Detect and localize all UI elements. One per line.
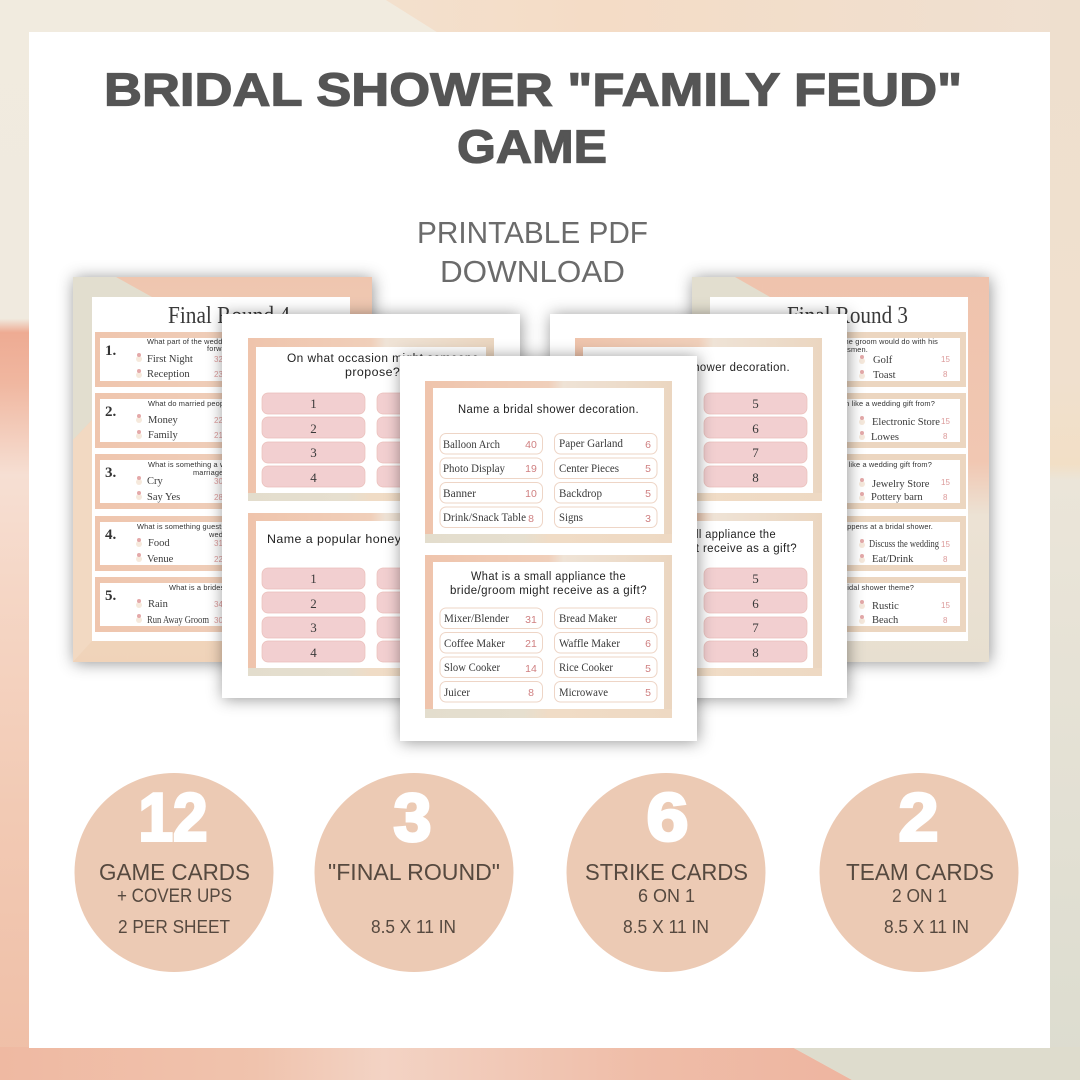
row 1: groomsmen. xyxy=(825,345,868,354)
row 3: Jewelry Store xyxy=(872,479,930,490)
card: bridal shower decoration answers: Backdrop xyxy=(559,487,602,500)
row 4: 4. xyxy=(105,527,116,543)
heading: Final Round 3: Final Round 3 xyxy=(787,303,908,329)
card: small appliance answers: 6 xyxy=(645,638,651,650)
row 1: 32 xyxy=(214,355,223,364)
card: honeymoon question: 4 xyxy=(310,645,317,660)
row 4 xyxy=(95,516,347,571)
card: bridal shower decoration answers: Balloon Arch xyxy=(443,438,500,451)
card: propose question: propose? xyxy=(345,365,400,379)
card: small appliance answers: 5 xyxy=(645,663,651,675)
card: bridal shower decoration answers: 10 xyxy=(525,488,537,500)
card: bridal shower decoration answers: Drink/Snack Table xyxy=(443,511,526,524)
card: decoration question: 5 xyxy=(752,396,759,411)
row 2 xyxy=(95,393,347,448)
page: answer cards center xyxy=(400,356,697,741)
row 4: 31 xyxy=(214,539,223,548)
circle: 3 final round: 3 xyxy=(394,780,432,856)
row 1: 8 xyxy=(943,370,948,379)
row 4: What is something guests xyxy=(137,522,225,531)
row 4: Eat/Drink xyxy=(872,554,914,565)
row 1: 1. xyxy=(105,343,116,359)
card: small appliance answers: What is a small appliance the xyxy=(471,569,626,583)
page: cover-up cards right xyxy=(550,314,847,698)
circle: 2 team cards xyxy=(820,773,1018,972)
card: propose question: 3 xyxy=(310,445,317,460)
row 2: 8 xyxy=(943,432,948,441)
card: decoration question xyxy=(575,338,822,501)
card: small appliance answers: Rice Cooker xyxy=(559,661,613,674)
row 1: First Night xyxy=(147,354,193,365)
card: appliance question: 7 xyxy=(752,620,759,635)
card: decoration question: 7 xyxy=(752,445,759,460)
circle: 2 team cards: 2 ON 1 xyxy=(892,886,947,906)
row 5: Run Away Groom xyxy=(147,615,209,626)
row 4: something that happens at a bridal shower. xyxy=(786,522,933,531)
card: propose question: 2 xyxy=(310,421,317,436)
row 5: 8 xyxy=(943,616,948,625)
row 2: What do married people xyxy=(148,399,230,408)
row 3: 15 xyxy=(941,478,950,487)
circle: 6 strike cards xyxy=(566,773,766,972)
card: appliance question: What is a small appliance the xyxy=(621,527,776,541)
card: small appliance answers: 8 xyxy=(528,687,534,699)
row 2 xyxy=(715,393,966,448)
circle: 12 game cards: 12 xyxy=(138,780,208,856)
circle: 12 game cards: + COVER UPS xyxy=(117,886,232,907)
row 2: 21 xyxy=(214,431,223,440)
card: honeymoon question: Name a popular honeymoon destination. xyxy=(267,532,507,546)
row 4: Discuss the wedding xyxy=(869,539,940,550)
card: small appliance answers: 5 xyxy=(645,687,651,699)
row 5: a popular bridal shower theme? xyxy=(806,583,914,592)
row 4: Venue xyxy=(147,554,174,565)
card: decoration question: Name a bridal shower decoration. xyxy=(608,360,790,374)
circle: 6 strike cards: 8.5 X 11 IN xyxy=(623,917,709,937)
row 5: 5. xyxy=(105,588,116,604)
row 4: wedding xyxy=(208,530,238,539)
title xyxy=(104,64,962,172)
card: bridal shower decoration answers: Signs xyxy=(559,511,583,524)
circle: 3 final round: 8.5 X 11 IN xyxy=(371,917,456,937)
row 2: Family xyxy=(148,430,179,441)
card: bridal shower decoration answers: Banner xyxy=(443,487,476,500)
card: appliance question xyxy=(575,513,822,676)
page: Final Round 3 xyxy=(692,277,989,662)
card: propose question xyxy=(248,338,494,501)
card: small appliance answers: Coffee Maker xyxy=(444,637,505,650)
row 1 xyxy=(715,332,966,387)
row 4: 22 xyxy=(214,555,223,564)
row 5: Rain xyxy=(148,599,169,610)
card: bridal shower decoration answers: Center Pieces xyxy=(559,462,619,475)
row 3: Cry xyxy=(147,476,164,487)
card: bridal shower decoration answers: 6 xyxy=(645,439,651,451)
row 3 xyxy=(715,454,966,509)
title: GAME xyxy=(457,120,607,172)
circle: 3 final round xyxy=(314,773,514,972)
row 5: 34 xyxy=(214,600,223,609)
row 1: Reception xyxy=(147,369,190,380)
row 1: What part of the wedding xyxy=(147,337,233,346)
card: bridal shower decoration answers: 19 xyxy=(525,463,537,475)
card: honeymoon question xyxy=(248,513,507,676)
card: appliance question: 8 xyxy=(752,645,759,660)
row 3: 30 xyxy=(214,477,223,486)
card: decoration question: 8 xyxy=(752,470,759,485)
card: bridal shower decoration answers: 3 xyxy=(645,513,651,525)
row 5 xyxy=(95,577,347,632)
card: decoration question: 6 xyxy=(752,421,759,436)
card: appliance question: bride/groom might receive as a gift? xyxy=(600,541,797,555)
card: bridal shower decoration answers: Name a bridal shower decoration. xyxy=(458,402,639,416)
circle: 12 game cards: 2 PER SHEET xyxy=(118,917,230,937)
row 1: Toast xyxy=(873,370,896,381)
card: honeymoon question: 1 xyxy=(310,571,317,586)
card: small appliance answers: Slow Cooker xyxy=(444,661,500,674)
card: small appliance answers: Juicer xyxy=(444,686,470,699)
card: bridal shower decoration answers: 8 xyxy=(528,513,534,525)
card: propose question: On what occasion might someone xyxy=(287,351,479,365)
card: small appliance answers: 6 xyxy=(645,614,651,626)
row 1: Golf xyxy=(873,355,893,366)
card: small appliance answers: Bread Maker xyxy=(559,612,617,625)
card: honeymoon question: 2 xyxy=(310,596,317,611)
row 5: What is a bridesmaid xyxy=(169,583,241,592)
row 2: 22 xyxy=(214,416,223,425)
row 5: Beach xyxy=(872,615,899,626)
circle: 6 strike cards: STRIKE CARDS xyxy=(585,859,748,885)
card: small appliance answers: Waffle Maker xyxy=(559,637,620,650)
row 2: would a man like a wedding gift from? xyxy=(805,399,935,408)
row 3: What is something a wife xyxy=(148,460,234,469)
circle: 2 team cards: TEAM CARDS xyxy=(846,859,994,885)
card: appliance question: 6 xyxy=(752,596,759,611)
circle: 6 strike cards: 6 xyxy=(646,780,688,856)
subtitle: DOWNLOAD xyxy=(440,254,625,289)
row 4: 15 xyxy=(941,540,950,549)
circle: 12 game cards xyxy=(74,773,274,972)
heading: Final Round 4: Final Round 4 xyxy=(168,303,290,329)
row 2: 2. xyxy=(105,404,116,420)
page: cover-up cards left xyxy=(222,314,520,698)
row 3: would a woman like a wedding gift from? xyxy=(792,460,932,469)
row 1: forward xyxy=(207,344,233,353)
row 5 xyxy=(715,577,966,632)
row 3: Say Yes xyxy=(147,492,180,503)
row 3: Pottery barn xyxy=(871,492,923,503)
subtitle xyxy=(417,215,648,289)
row 2: Electronic Store xyxy=(872,417,940,428)
row 5: 15 xyxy=(941,601,950,610)
row 1: the groom would do with his xyxy=(842,337,938,346)
row 2: 15 xyxy=(941,417,950,426)
row 4: 8 xyxy=(943,555,948,564)
circle: 6 strike cards: 6 ON 1 xyxy=(638,886,695,906)
row 3: marriage xyxy=(193,468,223,477)
card: small appliance answers: 21 xyxy=(525,638,537,650)
row 4: Food xyxy=(148,538,170,549)
subtitle: PRINTABLE PDF xyxy=(417,215,648,250)
card: honeymoon question: 3 xyxy=(310,620,317,635)
circle: 12 game cards: GAME CARDS xyxy=(99,859,250,885)
card: small appliance answers: 31 xyxy=(525,614,537,626)
title: BRIDAL SHOWER "FAMILY FEUD" xyxy=(104,64,962,116)
card: bridal shower decoration answers: 40 xyxy=(525,439,537,451)
card: bridal shower decoration answers: Photo Display xyxy=(443,462,505,475)
row 2: Lowes xyxy=(871,432,899,443)
row 5: 30 xyxy=(214,616,223,625)
card: bridal shower decoration answers: 5 xyxy=(645,488,651,500)
card: small appliance answers: Microwave xyxy=(559,686,608,699)
row 1: 15 xyxy=(941,355,950,364)
card: bridal shower decoration answers xyxy=(425,381,672,543)
page: Final Round 4 xyxy=(73,277,372,662)
row 2: Money xyxy=(148,415,178,426)
card: small appliance answers: Mixer/Blender xyxy=(444,612,509,625)
row 1 xyxy=(95,332,347,387)
circle: 2 team cards: 8.5 X 11 IN xyxy=(884,917,969,937)
card: small appliance answers: 14 xyxy=(525,663,537,675)
card: propose question: 1 xyxy=(310,396,317,411)
card: appliance question: 5 xyxy=(752,571,759,586)
circle: 3 final round: "FINAL ROUND" xyxy=(328,859,500,885)
card: propose question: 4 xyxy=(310,470,317,485)
row 4 xyxy=(715,516,966,571)
circle: 2 team cards: 2 xyxy=(898,780,938,856)
row 3: 28 xyxy=(214,493,223,502)
card: bridal shower decoration answers: Paper Garland xyxy=(559,437,623,450)
row 1: 23 xyxy=(214,370,223,379)
row 5: Rustic xyxy=(872,601,899,612)
card: small appliance answers xyxy=(425,555,672,718)
card: small appliance answers: bride/groom might receive as a gift? xyxy=(450,583,647,597)
row 3: 8 xyxy=(943,493,948,502)
row 3: 3. xyxy=(105,465,116,481)
card: bridal shower decoration answers: 5 xyxy=(645,463,651,475)
row 3 xyxy=(95,454,347,509)
